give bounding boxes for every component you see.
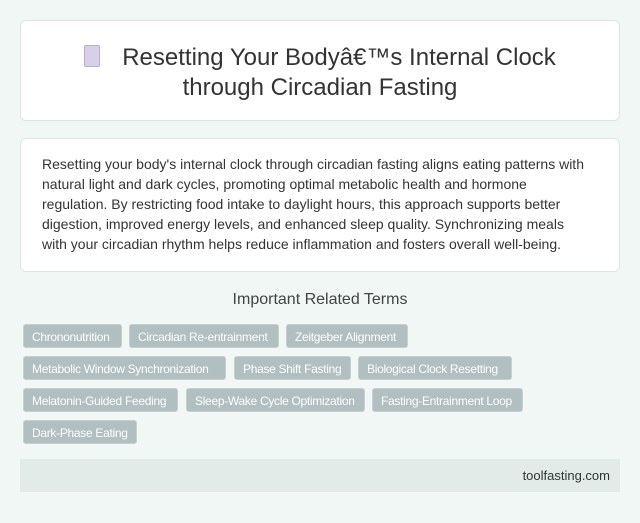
tags: Melatonin-Guided Feeding	[32, 394, 166, 408]
description panel	[20, 138, 620, 272]
title panel	[20, 20, 620, 121]
footer	[20, 459, 620, 492]
description text: Resetting your body's internal clock through circadian fasting aligns eating patterns with natural light and dark cycles, promoting optimal metabolic health and hormone regulation. By restricting food intake to daylight hours, this approach supports better digestion, improved energy levels, and enhanced sleep quality. Synchronizing meals with your circadian rhythm helps reduce inflammation and fosters overall well-being.	[42, 156, 584, 252]
title	[84, 44, 556, 101]
title: through Circadian Fasting	[183, 74, 457, 101]
tags: Metabolic Window Synchronization	[32, 362, 208, 376]
title: Resetting Your Bodyâ€™s Internal Clock	[122, 44, 556, 71]
tags: Phase Shift Fasting	[243, 362, 341, 376]
heading: related terms: Important Related Terms	[233, 291, 407, 308]
tags: Fasting-Entrainment Loop	[381, 394, 512, 408]
footer text: toolfasting.com	[523, 468, 610, 483]
tags: Dark-Phase Eating	[32, 426, 128, 440]
tags: Chrononutrition	[32, 330, 110, 344]
tags: Biological Clock Resetting	[367, 362, 498, 376]
tags: Circadian Re-entrainment	[138, 330, 268, 344]
tags: Zeitgeber Alignment	[295, 330, 396, 344]
tags: Sleep-Wake Cycle Optimization	[195, 394, 355, 408]
